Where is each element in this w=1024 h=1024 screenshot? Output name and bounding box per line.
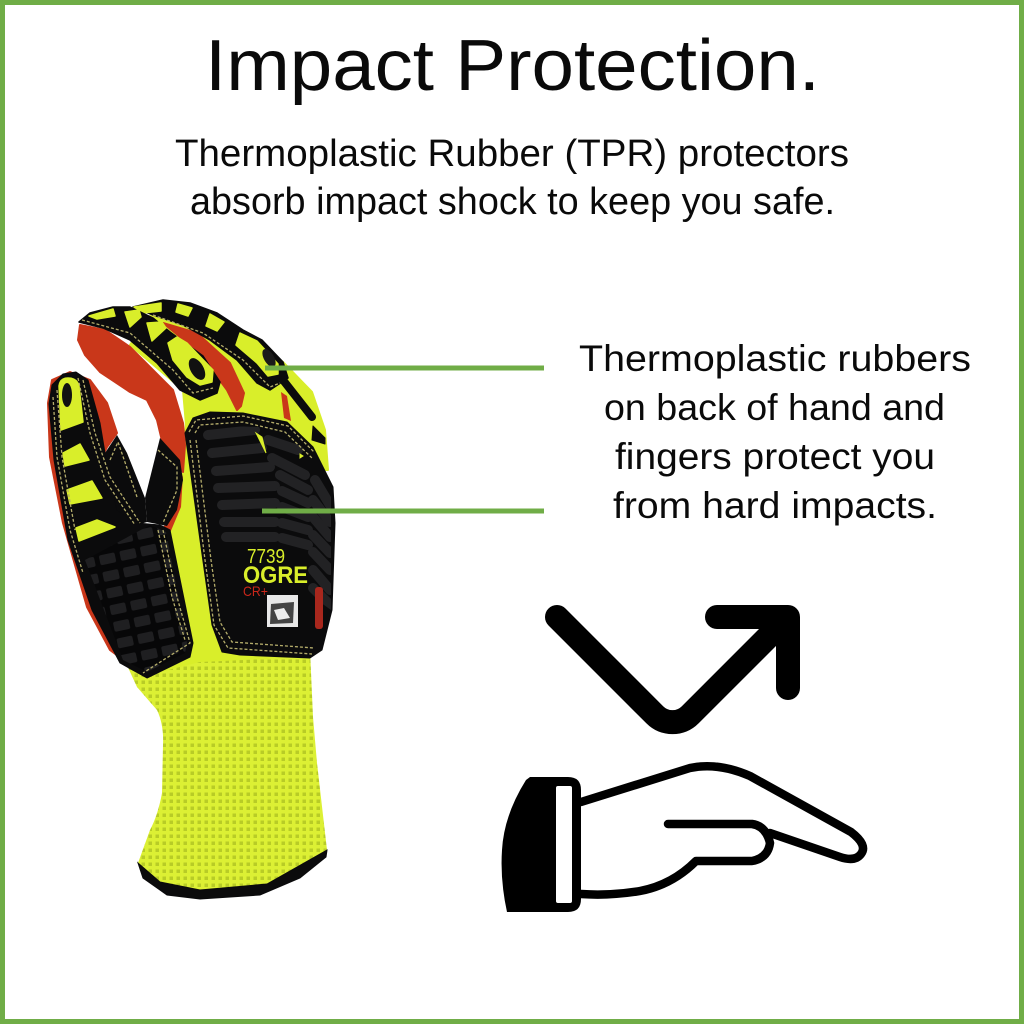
cuff (120, 650, 327, 890)
callout text: fingers protect you (615, 436, 935, 477)
back finger tip (312, 426, 325, 444)
back finger band (133, 300, 288, 390)
glove illustration (48, 300, 335, 899)
front finger bumps (89, 309, 213, 385)
icon: deflection arrow (557, 617, 788, 722)
cuff band (556, 786, 572, 903)
thumb red edge (48, 372, 150, 665)
leader line lower (262, 508, 544, 514)
thumb stitching (53, 378, 190, 673)
thumb bump hole (62, 383, 72, 407)
thumb yellow bumps (59, 378, 115, 541)
thumb web pad right (145, 438, 183, 526)
certification label (267, 595, 298, 627)
intro text (175, 133, 849, 223)
thumb black guard (49, 372, 193, 678)
pad yellow notches (256, 433, 303, 458)
palm (160, 412, 310, 672)
callout text (579, 338, 971, 526)
front finger hole (185, 355, 209, 383)
pad ridges (208, 430, 330, 605)
hand outline (581, 766, 863, 895)
back finger bumps (134, 303, 278, 376)
callout text: from hard impacts. (613, 485, 937, 526)
pad stitching (189, 416, 314, 654)
title: Impact Protection. (205, 26, 820, 106)
intro text: absorb impact shock to keep you safe. (190, 181, 835, 223)
fingers yellow base (130, 316, 328, 470)
red back finger (163, 323, 244, 410)
model number: 7739 (247, 546, 285, 568)
thumb grip grid (85, 528, 187, 672)
small red sliver (281, 392, 291, 421)
callout text: Thermoplastic rubbers (579, 338, 971, 379)
front finger band (79, 307, 220, 400)
red web edge (163, 475, 183, 533)
red side mark (315, 587, 323, 629)
finger stitching (82, 315, 280, 393)
leader line upper (265, 366, 544, 370)
brand mark: OGRE (243, 562, 308, 589)
intro text: Thermoplastic Rubber (TPR) protectors (175, 133, 849, 175)
cuff hem (138, 850, 327, 899)
red index finger (78, 325, 185, 472)
icon: hand (502, 766, 863, 912)
thumb web pad left (105, 435, 147, 525)
back finger strip (283, 380, 312, 417)
back finger hole (260, 347, 278, 369)
hand cuff (502, 777, 581, 912)
back of hand pad (185, 412, 335, 658)
callout text: on back of hand and (604, 387, 945, 428)
cut rating: CR+ (243, 583, 268, 599)
